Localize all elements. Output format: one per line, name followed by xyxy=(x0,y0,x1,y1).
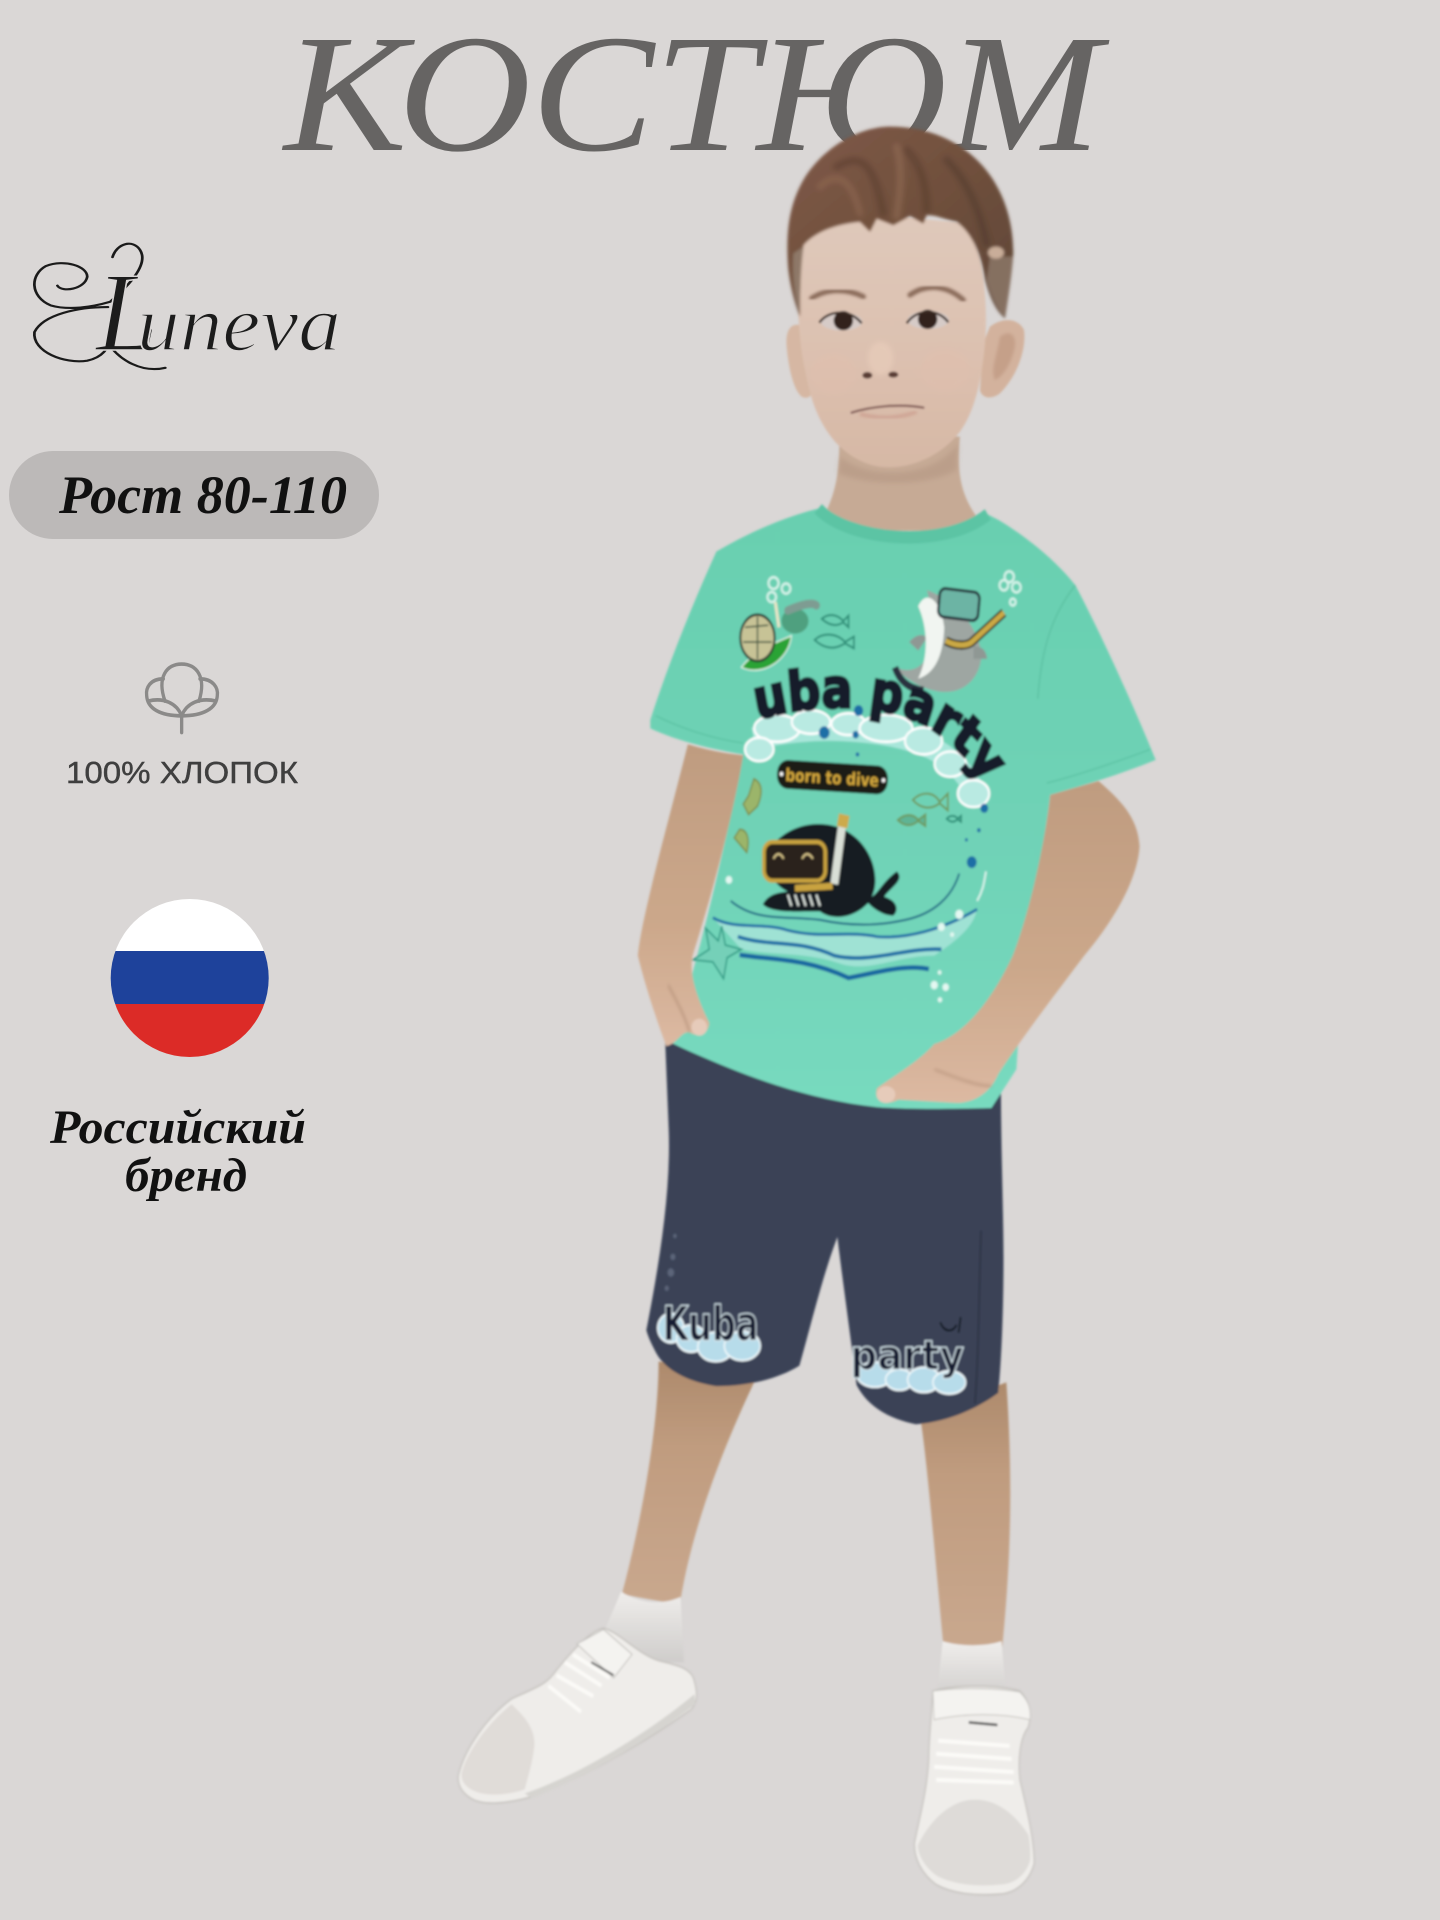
legs, socks and shoes xyxy=(458,1029,1034,1895)
print: born to dive label: born to dive xyxy=(785,765,879,791)
nose xyxy=(862,342,898,379)
left shoe xyxy=(458,1628,697,1803)
print: blue dots xyxy=(819,705,988,868)
eyebrows xyxy=(812,291,863,298)
brand logo: Luneva xyxy=(34,244,341,375)
head and neck xyxy=(786,127,1024,531)
right sock xyxy=(936,1641,1006,1701)
right eye xyxy=(907,310,949,329)
brand logo: Luneva: L xyxy=(94,251,158,375)
torso: t-shirt and arms xyxy=(636,503,1157,1111)
brand origin text: бренд xyxy=(125,1149,247,1202)
photo: boy in outfit xyxy=(460,124,1157,1896)
print: water bubbles lettering backdrop xyxy=(745,710,989,807)
material label: 100% ХЛОПОК xyxy=(66,755,298,790)
shorts print: Scuba: Kuba xyxy=(663,1297,759,1353)
title: КОСТЮМ xyxy=(282,1,1110,187)
brand origin text: Российский xyxy=(49,1101,306,1154)
shorts print: party xyxy=(850,1317,966,1394)
height badge xyxy=(9,451,379,539)
left sock xyxy=(606,1592,684,1662)
face xyxy=(798,210,986,467)
shorts print: party: party xyxy=(850,1331,964,1379)
print: small fish xyxy=(815,615,961,826)
print: starfish xyxy=(693,926,741,979)
brand logo: Luneva: uneva xyxy=(137,280,341,367)
neck xyxy=(820,437,977,531)
print: turtle xyxy=(740,602,816,670)
print: Scuba party lettering: uba party xyxy=(752,666,1007,780)
print: waves xyxy=(713,871,986,978)
right leg xyxy=(920,1382,1010,1647)
brand origin text xyxy=(49,1101,306,1202)
left ear xyxy=(786,325,813,398)
height badge: Рост 80-110 xyxy=(58,465,347,525)
left arm and hand xyxy=(638,744,743,1046)
right arm and hand xyxy=(876,781,1140,1103)
print: dolphin xyxy=(895,588,1004,692)
shorts xyxy=(646,1029,1004,1424)
icon: russian flag xyxy=(110,899,269,1057)
left leg xyxy=(622,1362,757,1605)
t-shirt xyxy=(650,509,1156,1109)
left eye xyxy=(819,311,862,331)
right shoe xyxy=(914,1686,1034,1895)
print: whale with goggles xyxy=(763,815,899,917)
bubbles top xyxy=(767,571,1021,605)
print: olive fish left xyxy=(734,779,761,852)
print: bubbles xyxy=(726,876,963,1002)
mouth xyxy=(852,406,923,413)
hair xyxy=(787,127,1013,318)
icon: cotton flower xyxy=(147,664,217,732)
right ear xyxy=(980,320,1024,397)
